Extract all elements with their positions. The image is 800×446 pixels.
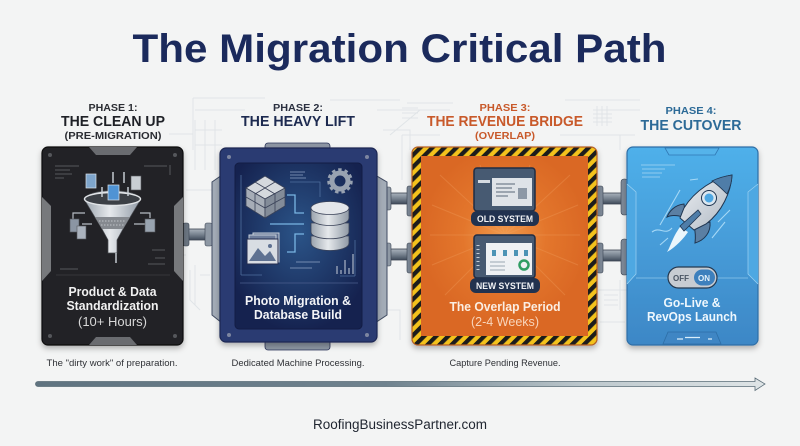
phase 1 card label	[66, 284, 159, 329]
phase 1 heading: (PRE-MIGRATION)	[64, 130, 162, 142]
phase 3	[412, 102, 597, 369]
new system label: NEW SYSTEM	[476, 281, 534, 292]
title: The Migration Critical Path	[132, 27, 666, 71]
phase 2	[212, 102, 387, 369]
phase 1 heading: PHASE 1:	[88, 102, 138, 114]
phase 3 card label: The Overlap Period	[450, 299, 561, 314]
timeline arrow	[36, 378, 765, 390]
phase 4 heading	[640, 105, 742, 134]
phase 2 card label: Photo Migration &	[245, 293, 351, 308]
connector pipes between phase 1 and 2	[183, 223, 213, 246]
icon: funnel with documents	[70, 172, 155, 263]
on/off toggle	[668, 267, 717, 288]
phase 3 heading: (OVERLAP)	[475, 130, 535, 142]
on/off toggle: OFF	[673, 274, 689, 283]
old system screen	[474, 168, 535, 211]
phase 1 caption: The "dirty work" of preparation.	[46, 358, 178, 369]
icon: bar chart	[337, 254, 353, 274]
connector pipes between phase 3 and 4	[596, 179, 628, 275]
phase 1 card label: (10+ Hours)	[78, 314, 147, 329]
icon: cube	[246, 176, 285, 218]
phase 2 heading	[241, 102, 355, 130]
icon: database	[311, 202, 349, 250]
phase 4 card label	[647, 295, 737, 324]
icon: arrows	[270, 195, 304, 252]
phase 1 card	[42, 147, 183, 345]
phase 4 card label: RevOps Launch	[647, 309, 737, 324]
phase 4 card label: Go-Live &	[664, 295, 720, 310]
new system screen	[474, 235, 535, 278]
old system label	[471, 211, 539, 226]
phase 4 heading: PHASE 4:	[666, 105, 716, 117]
phase 2 card	[212, 143, 387, 350]
phase 1 heading	[61, 102, 165, 142]
phase 4	[627, 105, 758, 345]
footer website: RoofingBusinessPartner.com	[313, 417, 487, 432]
icon: gear	[328, 170, 352, 192]
phase 3 card label	[450, 299, 561, 329]
on/off toggle: ON	[698, 274, 710, 283]
connector pipes between phase 2 and 3	[385, 186, 415, 273]
icon: rocket	[652, 175, 732, 252]
phase 2 heading: THE HEAVY LIFT	[241, 114, 355, 130]
phase 1 card label: Product & Data	[68, 284, 157, 299]
phase 1 card label: Standardization	[66, 298, 159, 313]
phase 1 heading: THE CLEAN UP	[61, 114, 165, 130]
phase 4 card	[627, 147, 758, 345]
phase 3 caption: Capture Pending Revenue.	[450, 358, 560, 369]
phase 2 heading: PHASE 2:	[273, 102, 323, 114]
phase 3 card	[412, 147, 597, 345]
phase 3 card label: (2-4 Weeks)	[471, 314, 539, 329]
phase 4 heading: THE CUTOVER	[640, 118, 742, 134]
phase 3 heading	[427, 102, 583, 142]
phase 2 card label	[245, 293, 351, 322]
phase 2 caption: Dedicated Machine Processing.	[232, 358, 364, 369]
phase 2 card label: Database Build	[254, 307, 342, 322]
new system label	[470, 278, 540, 293]
phase 1	[42, 102, 183, 369]
phase 3 heading: THE REVENUE BRIDGE	[427, 114, 583, 130]
old system label: OLD SYSTEM	[477, 214, 533, 225]
phase 3 heading: PHASE 3:	[480, 102, 530, 114]
icon: photo stack	[247, 233, 279, 264]
